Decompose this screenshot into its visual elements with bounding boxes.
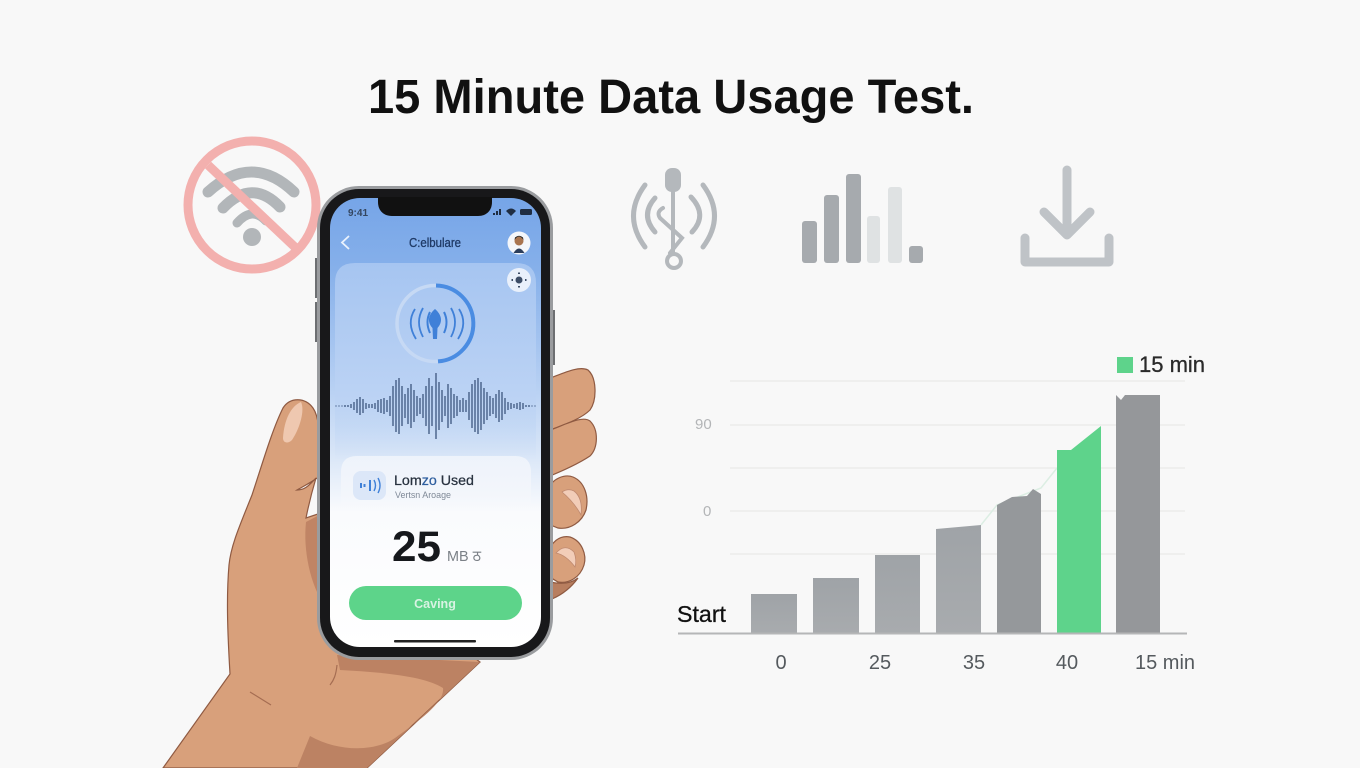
x axis labels: 25: [869, 652, 891, 674]
x axis labels: 15 min: [1135, 652, 1195, 674]
small button: [507, 268, 531, 292]
icon: bar signal: [802, 174, 923, 263]
usage card: [341, 456, 531, 516]
bars: [751, 395, 1160, 633]
notch: [378, 197, 492, 216]
green button: Caving: [414, 597, 456, 611]
fingers: [545, 369, 596, 599]
main panel: [335, 263, 536, 460]
phone: [315, 186, 555, 660]
trend line: [981, 468, 1057, 525]
icon: download: [1025, 170, 1109, 262]
x axis labels: [775, 652, 1195, 674]
palm shadow: [297, 655, 480, 768]
legend: 15 min: [1139, 352, 1205, 377]
screen: [330, 198, 541, 647]
title: 15 Minute Data Usage Test.: [368, 71, 974, 124]
palm and thumb: [163, 400, 480, 768]
bar notch: [1116, 395, 1125, 400]
status icons: [493, 208, 532, 216]
thumb nail: [283, 402, 302, 442]
avatar: [508, 232, 530, 254]
highlighted bar: [1057, 426, 1101, 633]
y axis labels: 90: [695, 416, 712, 433]
x axis labels: 0: [775, 652, 787, 674]
hand holding phone: [163, 369, 596, 768]
status time: 9:41: [348, 208, 368, 219]
y axis labels: [695, 416, 712, 520]
green button: [349, 586, 522, 620]
screen heading: C:elbulare: [409, 236, 461, 250]
icon: no wifi: [188, 141, 316, 269]
y axis labels: 0: [703, 503, 711, 520]
bar chart: [677, 352, 1205, 674]
grid lines: [730, 381, 1185, 554]
card subtitle: Vertsn Aroage: [395, 490, 451, 501]
phone body: [317, 186, 553, 660]
gauge: [397, 286, 473, 362]
home indicator: [394, 640, 476, 642]
x axis labels: 35: [963, 652, 985, 674]
baseline: [678, 632, 1187, 634]
card title: Lomzo Used: [394, 472, 474, 488]
card icon: [353, 471, 386, 500]
usage value: 25: [392, 523, 441, 571]
side buttons: [315, 258, 555, 365]
icon: antenna signal: [634, 168, 714, 268]
usage value: MB ठ: [447, 548, 481, 565]
x axis labels: 40: [1056, 652, 1078, 674]
start label: Start: [677, 601, 727, 627]
back chevron: [342, 236, 349, 249]
usage value: [392, 523, 481, 571]
waveform: [336, 373, 535, 439]
